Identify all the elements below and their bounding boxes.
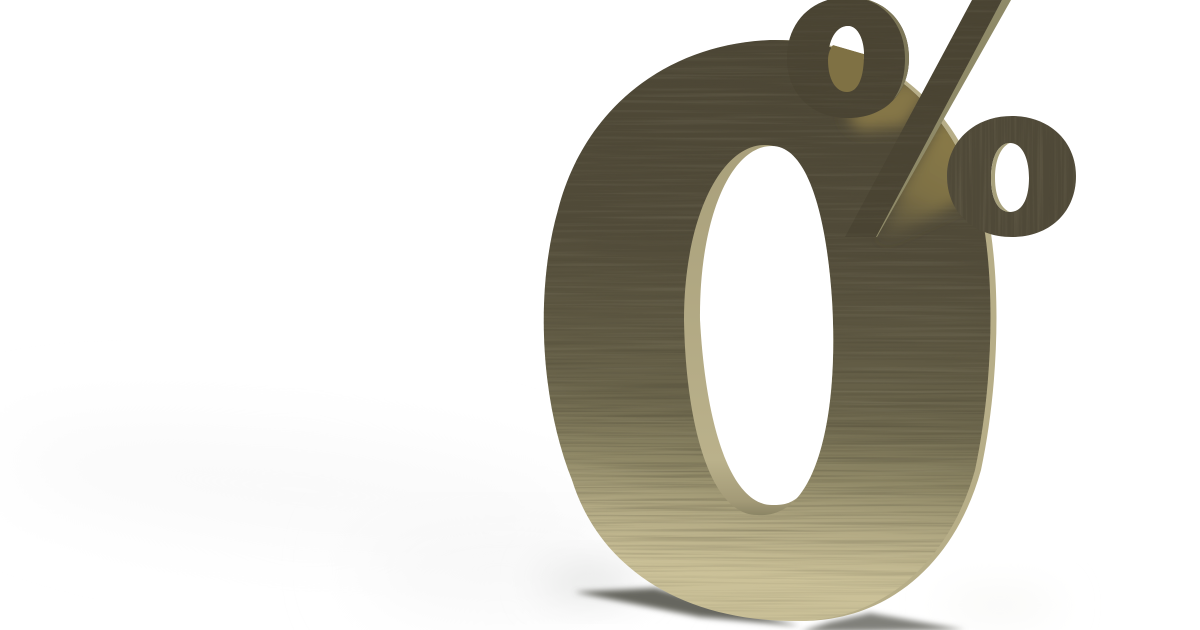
illustration: 3D zero percent bbox=[526, 0, 1076, 630]
zero hole bbox=[700, 146, 833, 505]
zero brushed texture bbox=[535, 36, 1005, 626]
contact shadow right bbox=[800, 613, 965, 630]
percent sign bbox=[780, 0, 1078, 240]
upper ring edge bbox=[848, 0, 909, 100]
zero hole bevel bbox=[684, 145, 833, 515]
numeral zero bbox=[535, 36, 1005, 626]
zero rim bbox=[550, 40, 996, 621]
upper ring hole white background bbox=[833, 26, 864, 54]
percent lower ring bbox=[945, 114, 1078, 239]
floor shadow bbox=[0, 409, 1060, 630]
percent slash and upper ring bbox=[789, 0, 1002, 237]
zero face bbox=[544, 40, 990, 621]
lower ring hole rim bbox=[991, 143, 1010, 212]
slash side bbox=[872, 0, 1011, 237]
reflections from percent sign bbox=[844, 84, 956, 232]
contact shadow left bbox=[574, 588, 800, 626]
upper ring hole reflection bbox=[828, 45, 864, 92]
